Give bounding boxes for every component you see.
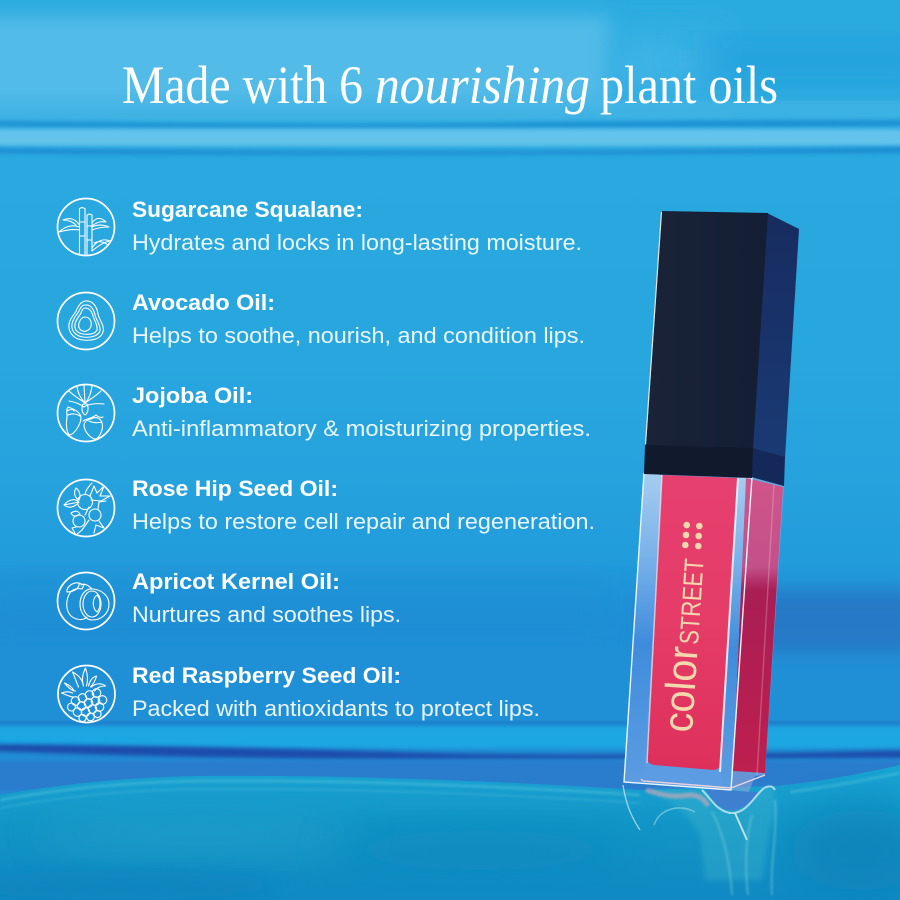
water surface foreground [0,765,900,900]
item: apricot kernel oil [58,569,401,630]
item: rose hip seed oil [58,476,595,536]
heading: Apricot Kernel Oil: [132,569,340,594]
collar side [751,448,785,486]
water reflection under bottle [623,785,776,895]
lip colour front [647,475,738,770]
icon: avocado [58,292,114,350]
cap side [752,213,799,458]
glass body [624,473,784,792]
collar front [644,445,753,478]
icon: apricot [58,572,114,630]
title [122,55,778,115]
lip colour side [733,478,783,773]
heading: Jojoba Oil: [132,383,253,408]
description: Anti-inflammatory & moisturizing properties. [132,416,591,441]
title: nourishing [375,55,590,115]
logo: colorSTREET: STREET [674,558,710,645]
description: Packed with antioxidants to protect lips. [132,696,540,721]
item: avocado oil [58,290,585,350]
logo: colorSTREET [654,522,710,734]
description: Helps to restore cell repair and regeneration. [132,509,595,534]
title: plant oils [600,55,778,115]
description: Hydrates and locks in long-lasting moisture. [132,230,582,255]
cap highlight [646,212,662,444]
item: red raspberry seed oil [58,663,540,722]
description: Helps to soothe, nourish, and condition lips. [132,323,585,348]
cap front [646,211,768,449]
glass highlights [624,473,774,790]
heading: Rose Hip Seed Oil: [132,476,338,501]
item: sugarcane squalane [58,197,582,256]
description: Nurtures and soothes lips. [132,602,401,627]
icon: sugarcane [58,198,114,256]
oil list [58,197,595,722]
logo: colorSTREET: color [654,645,707,734]
icon: jojoba [58,384,114,442]
icon: raspberry [58,666,115,722]
item: jojoba oil [58,383,591,442]
title: Made with 6 [122,55,363,115]
heading: Red Raspberry Seed Oil: [132,663,401,688]
icon: rose hip [58,480,114,536]
heading: Sugarcane Squalane: [132,197,363,222]
product: lip gloss bottle [623,211,799,895]
heading: Avocado Oil: [132,290,275,315]
